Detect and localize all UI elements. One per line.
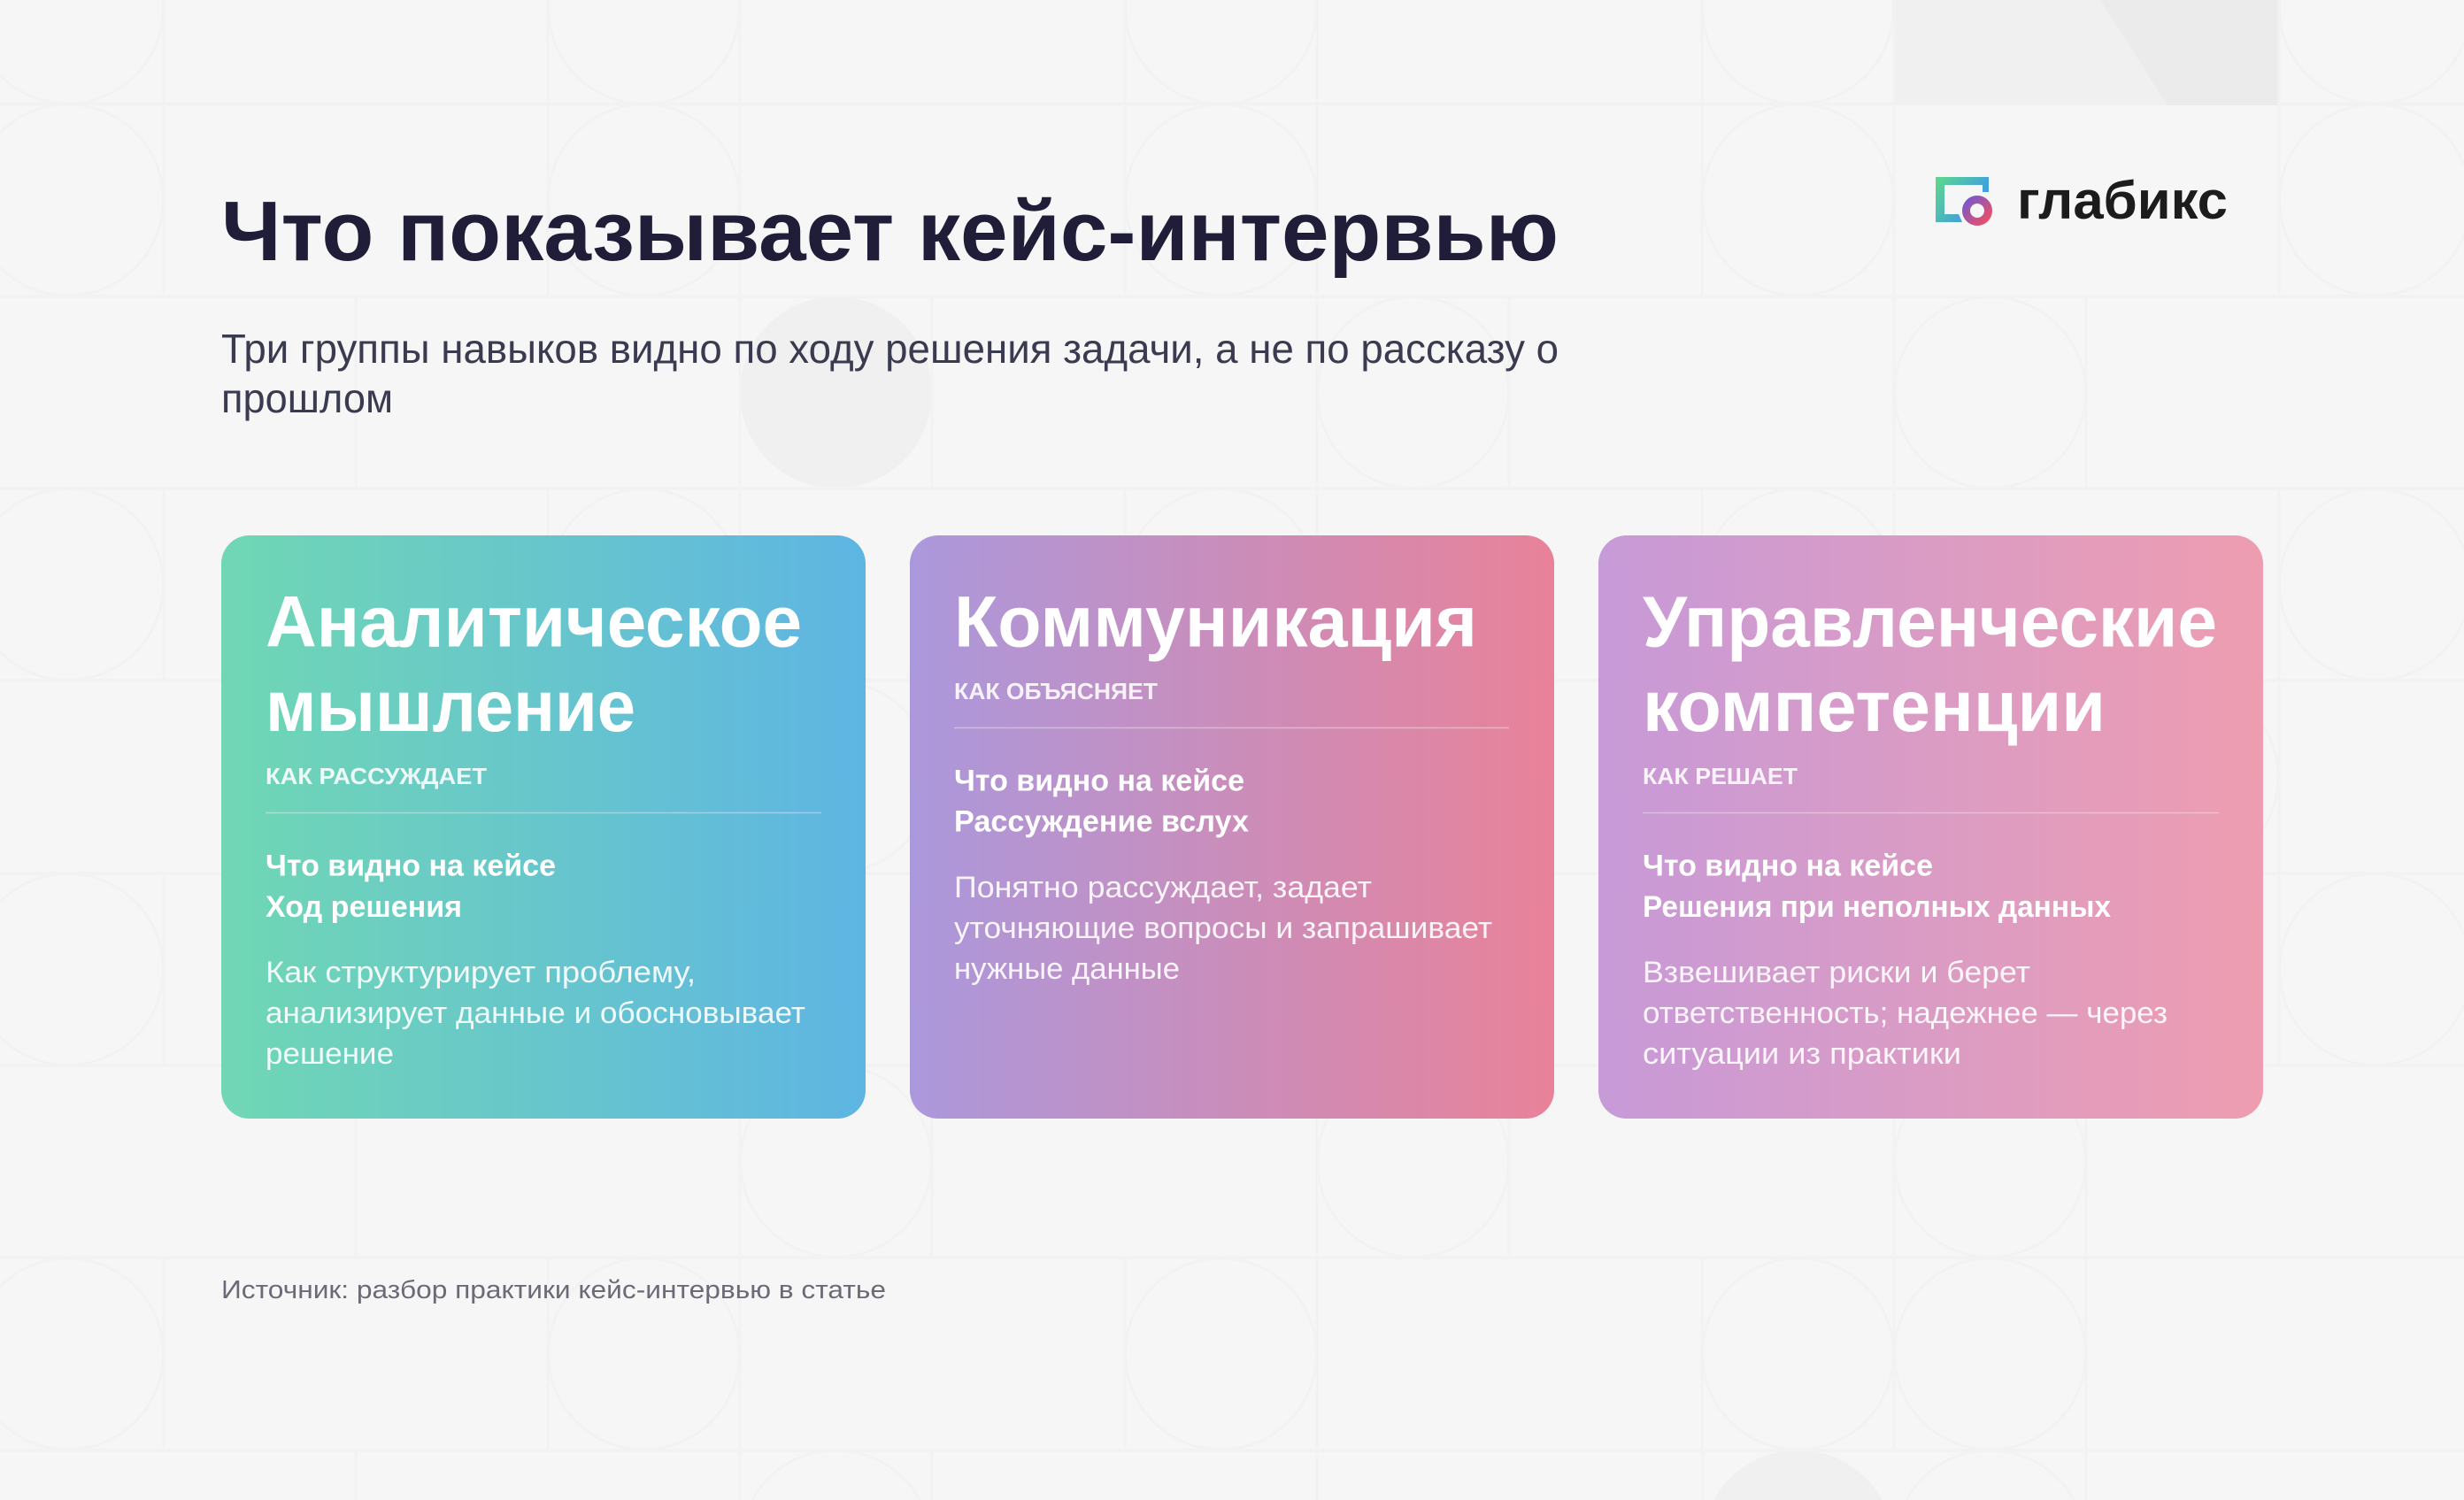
- subtitle: Три группы навыков видно по ходу решения задачи, а не по рассказу о: [221, 326, 1559, 372]
- card label: КАК РАССУЖДАЕТ: [266, 763, 487, 789]
- card description: Как структурирует проблему,: [266, 956, 696, 989]
- card heading: Управленческие: [1643, 582, 2217, 662]
- what is visible: [954, 765, 1249, 839]
- source note: Источник: разбор практики кейс-интервью в статье: [221, 1276, 886, 1304]
- what is visible: Ход решения: [266, 890, 462, 924]
- subtitle: [221, 326, 1559, 421]
- card description: анализирует данные и обосновывает: [266, 996, 805, 1030]
- card heading: [1643, 582, 2217, 747]
- card heading: мышление: [266, 666, 635, 747]
- card heading: Аналитическое: [266, 582, 802, 662]
- card description: нужные данные: [954, 952, 1180, 986]
- logo wordmark: глабикс: [2017, 171, 2228, 230]
- card description: Понятно рассуждает, задает: [954, 871, 1372, 904]
- card description: [1643, 956, 2168, 1071]
- title: Что показывает кейс-интервью: [221, 184, 1559, 279]
- what is visible: Решения при неполных данных: [1643, 890, 2111, 924]
- card heading: [266, 582, 802, 747]
- panel: analytical thinking: [221, 535, 866, 1119]
- what is visible: Рассуждение вслух: [954, 805, 1249, 839]
- card label: КАК РЕШАЕТ: [1643, 763, 1798, 789]
- panel: management competencies: [1598, 535, 2263, 1119]
- card description: ответственность; надежнее — через: [1643, 996, 2168, 1030]
- card description: решение: [266, 1037, 394, 1071]
- what is visible: [1643, 850, 2111, 924]
- card description: ситуации из практики: [1643, 1037, 1961, 1071]
- what is visible: Что видно на кейсе: [954, 765, 1244, 798]
- card description: Взвешивает риски и берет: [1643, 956, 2030, 989]
- what is visible: Что видно на кейсе: [1643, 850, 1933, 883]
- icon: logo mark: [1936, 177, 1989, 222]
- what is visible: Что видно на кейсе: [266, 850, 556, 883]
- what is visible: [266, 850, 556, 924]
- card description: [954, 871, 1492, 986]
- subtitle: прошлом: [221, 375, 393, 421]
- card description: уточняющие вопросы и запрашивает: [954, 912, 1492, 945]
- card description: [266, 956, 805, 1071]
- card label: КАК ОБЪЯСНЯЕТ: [954, 678, 1158, 704]
- card heading: компетенции: [1643, 666, 2106, 747]
- logo: [1936, 171, 2228, 230]
- panel: communication: [910, 535, 1554, 1119]
- card heading: Коммуникация: [954, 582, 1477, 662]
